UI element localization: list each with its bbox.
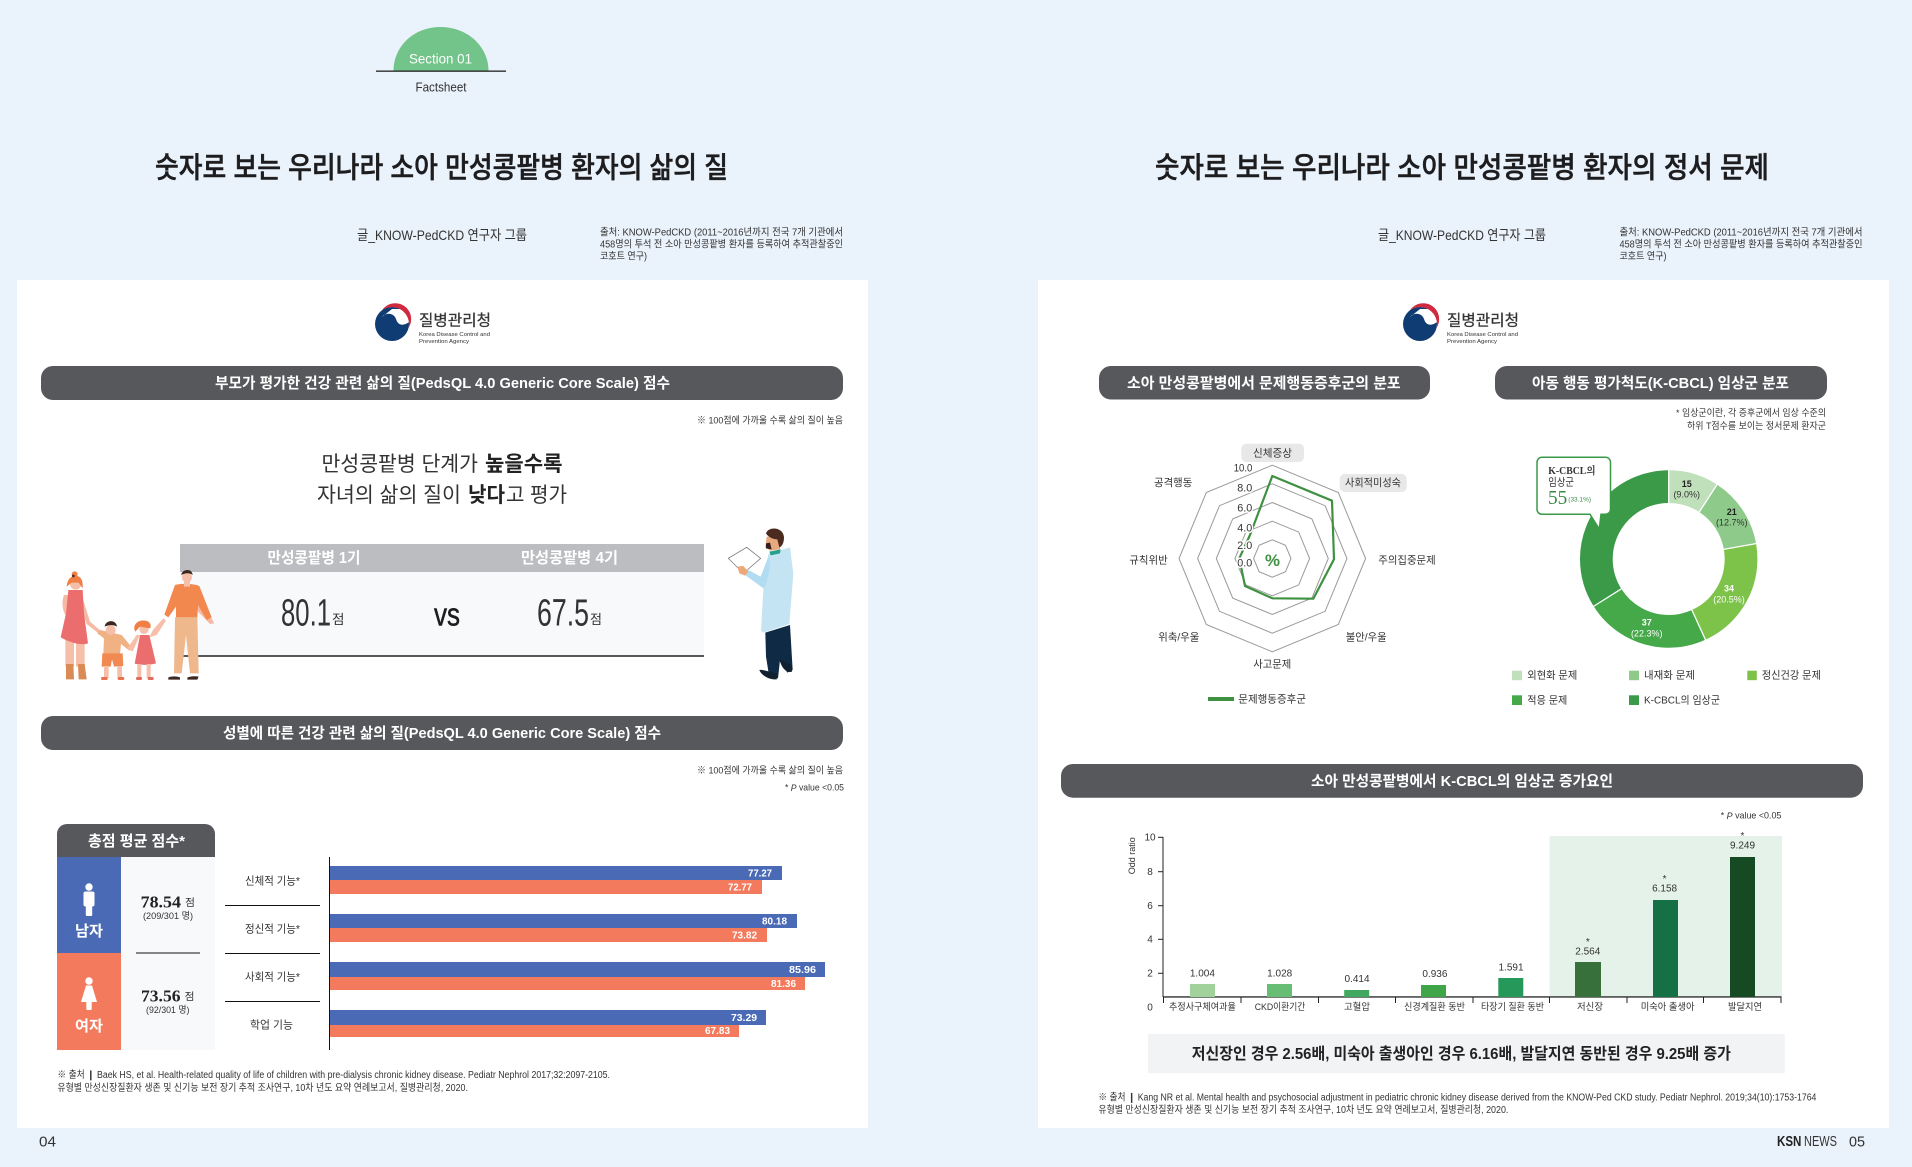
comparison table: stage 1 vs stage 4: 67.5 (537, 593, 589, 635)
donut chart: K-CBCL clinical groups: 21 (1727, 507, 1737, 517)
footnote: left references (57, 1069, 610, 1094)
source note: left page: 출처: KNOW-PedCKD (2011~2016년까지 전국 7개 기관에서 (600, 227, 843, 239)
bar chart: QoL domains by gender: 80.18 (762, 916, 787, 928)
source note: left page: 458명의 투석 전 소아 만성콩팥병 환자를 등록하여 추적관찰중인 (600, 238, 843, 251)
footnote: right references (1098, 1092, 1817, 1116)
panel: total mean scores: 점 (185, 897, 195, 909)
radar chart: problem behavior syndromes: 10.0 (1234, 463, 1252, 475)
title: right page: 숫자로 보는 우리나라 소아 만성콩팥병 환자의 정서 문제 (1155, 152, 1769, 185)
callout: K-CBCL clinical group count (1537, 457, 1610, 529)
panel: total mean scores: 78.54 (141, 893, 182, 912)
donut chart: K-CBCL clinical groups (1512, 457, 1821, 706)
logo: left: Korea Disease Control and (419, 332, 490, 338)
bar chart: odds ratios: 8 (1147, 867, 1153, 878)
bar chart: odds ratios: 10 (1144, 832, 1156, 843)
radar chart: problem behavior syndromes: 문제행동증후군 (1238, 694, 1306, 706)
panel: total mean scores: (92/301 명) (146, 1005, 190, 1016)
bar chart: odds ratios: 9.249 (1730, 840, 1755, 851)
panel: total mean scores: 73.56 (141, 987, 180, 1006)
headline message: 만성콩팥병 단계가 (322, 453, 478, 476)
logo: right: 질병관리청 (1447, 312, 1519, 330)
bar chart: odds ratios: 0.936 (1422, 969, 1448, 980)
section badge: Factsheet (416, 81, 467, 95)
notes: score meaning and p value (697, 765, 844, 794)
bar chart: QoL domains by gender: 85.96 (789, 964, 816, 976)
donut chart: K-CBCL clinical groups: (22.3%) (1631, 628, 1662, 638)
radar chart: problem behavior syndromes: 8.0 (1237, 483, 1252, 495)
callout: K-CBCL clinical group count: K-CBCL의 (1548, 464, 1596, 477)
bar chart: QoL domains by gender: 신체적 기능* (245, 875, 301, 888)
note: clinical group definition: * 임상군이란, 각 증후군에서 임상 수준의 (1676, 407, 1826, 419)
donut legend: 정신건강 문제 (1762, 670, 1821, 682)
brand and page number: 05 (1777, 1134, 1865, 1151)
donut chart: K-CBCL clinical groups: (12.7%) (1716, 518, 1747, 528)
donut legend: 적응 문제 (1527, 694, 1567, 706)
heading bar: K-CBCL risk factors (1061, 764, 1863, 798)
donut chart: K-CBCL clinical groups: (9.0%) (1673, 489, 1700, 499)
radar chart: problem behavior syndromes: 규칙위반 (1129, 554, 1168, 567)
logo: right: Prevention Agency (1447, 339, 1497, 345)
source note: right page: 코호트 연구) (1620, 251, 1666, 263)
bar chart: QoL domains by gender: 77.27 (748, 868, 772, 880)
donut legend: K-CBCL의 임상군 (1644, 693, 1720, 706)
source note: right page: 출처: KNOW-PedCKD (2011~2016년까지 전국 7개 기관에서 (1620, 227, 1862, 239)
panel: left page (17, 280, 868, 1128)
bar chart: QoL domains by gender: 67.83 (705, 1025, 730, 1037)
bar chart: odds ratios: 발달지연 (1728, 1001, 1762, 1013)
logo: right: Korea Disease Control and (1447, 332, 1518, 338)
bar chart: QoL domains by gender: 73.82 (732, 930, 757, 942)
bar chart: odds ratios: 2.564 (1575, 946, 1601, 957)
section badge (376, 27, 506, 95)
bar chart: QoL domains by gender: 72.77 (728, 882, 752, 894)
callout: K-CBCL clinical group count: (33.1%) (1568, 498, 1591, 504)
note: p value: * P value <0.05 (1721, 811, 1781, 822)
bar chart: odds ratios: 추정사구체여과율 (1169, 1001, 1236, 1013)
bar chart: odds ratios: 6.158 (1652, 883, 1678, 894)
heading bar: QoL by gender (41, 716, 843, 750)
comparison table: stage 1 vs stage 4: vs (434, 597, 460, 633)
panel: right page (1038, 280, 1889, 1128)
bar chart: odds ratios: 신경계질환 동반 (1404, 1001, 1465, 1013)
bar chart: odds ratios: 1.004 (1190, 968, 1215, 979)
headline message: 자녀의 삶의 질이 (317, 484, 461, 507)
source note: right page (1620, 227, 1862, 263)
callout: key finding: 저신장인 경우 2.56배, 미숙아 출생아인 경우 6.16배, 발달지연 동반된 경우 9.25배 증가 (1192, 1045, 1731, 1063)
headline message: 높을수록 (485, 453, 562, 476)
radar chart: problem behavior syndromes: % (1265, 551, 1280, 570)
heading bar: K-CBCL risk factors: 소아 만성콩팥병에서 K-CBCL의 임상군 증가요인 (1311, 773, 1613, 790)
bar chart: QoL domains by gender: 사회적 기능* (245, 971, 301, 984)
heading bar: parent-rated QoL: 부모가 평가한 건강 관련 삶의 질(PedsQL 4.0 Generic Core Scale) 점수 (215, 375, 670, 392)
comparison table: stage 1 vs stage 4: 만성콩팥병 1기 (268, 549, 360, 567)
radar chart: problem behavior syndromes: 사회적미성숙 (1345, 477, 1401, 489)
panel: total mean scores: 남자 (75, 923, 103, 940)
donut legend: 내재화 문제 (1644, 670, 1695, 682)
comparison table: stage 1 vs stage 4: 점 (590, 612, 602, 627)
comparison table: stage 1 vs stage 4: 만성콩팥병 4기 (521, 549, 618, 567)
logo: left (375, 303, 491, 345)
panel: total mean scores: (209/301 명) (143, 911, 193, 922)
notes: score meaning and p value: * P value <0.05 (785, 783, 844, 794)
note: clinical group definition: 하위 T점수를 보이는 정서문제 환자군 (1687, 420, 1826, 432)
headline message: 고 평가 (506, 484, 567, 507)
logo: right (1403, 303, 1519, 345)
radar chart: problem behavior syndromes: 2.0 (1237, 540, 1252, 552)
logo: left: 질병관리청 (419, 312, 491, 330)
donut legend (1512, 670, 1821, 706)
bar chart: QoL domains by gender: 학업 기능 (250, 1019, 293, 1032)
panel: total mean scores: 총점 평균 점수* (88, 833, 185, 850)
donut chart: K-CBCL clinical groups: 37 (1642, 617, 1652, 627)
footnote: right references: 유형별 만성신장질환자 생존 및 신기능 보전 장기 추적 조사연구, 10차 년도 요약 연례보고서, 질병관리청, 2020. (1098, 1104, 1508, 1116)
bar chart: odds ratios: * (1663, 874, 1667, 885)
radar chart: problem behavior syndromes: 위축/우울 (1158, 631, 1200, 644)
source note: left page (600, 227, 843, 263)
bar chart: odds ratios: * (1741, 831, 1745, 842)
donut chart: K-CBCL clinical groups: 34 (1724, 584, 1734, 594)
panel: total mean scores (57, 824, 215, 1050)
headline message: 낮다 (468, 484, 505, 507)
page number: 04: 04 (39, 1134, 56, 1151)
byline: left page: 글_KNOW-PedCKD 연구자 그룹 (357, 227, 527, 243)
bar chart: odds ratios: 0.414 (1344, 974, 1370, 985)
bar chart: odds ratios: Odd ratio (1127, 837, 1137, 874)
comparison table: stage 1 vs stage 4: 점 (332, 612, 344, 627)
title: left page: 숫자로 보는 우리나라 소아 만성콩팥병 환자의 삶의 질 (155, 152, 728, 185)
note: score meaning: ※ 100점에 가까울 수록 삶의 질이 높음 (697, 415, 843, 427)
bar chart: QoL domains by gender: 81.36 (771, 978, 796, 990)
bar chart: QoL domains by gender: 73.29 (731, 1012, 757, 1024)
logo: left: Prevention Agency (419, 339, 469, 345)
icon: female (81, 977, 97, 1010)
bar chart: QoL domains by gender (225, 857, 825, 1050)
radar chart: problem behavior syndromes: 0.0 (1237, 557, 1252, 569)
bar chart: odds ratios: 미숙아 출생아 (1641, 1002, 1695, 1013)
notes: score meaning and p value: ※ 100점에 가까울 수록 삶의 질이 높음 (697, 765, 843, 777)
donut chart: K-CBCL clinical groups: 15 (1682, 479, 1692, 489)
bar chart: odds ratios: 저신장 (1577, 1002, 1603, 1013)
radar chart: problem behavior syndromes: 사고문제 (1253, 659, 1291, 671)
heading bar: problem behavior distribution: 소아 만성콩팥병에서 문제행동증후군의 분포 (1127, 375, 1401, 392)
illustration: family (61, 570, 214, 680)
comparison table: stage 1 vs stage 4 (180, 544, 704, 657)
headline message (317, 453, 567, 507)
bar chart: odds ratios: 2 (1147, 968, 1153, 979)
radar chart: problem behavior syndromes: 주의집중문제 (1378, 555, 1436, 567)
footnote: right references: ※ 출처 ❙ Kang NR et al. Mental health and psychosocial adjustment in pediatric chronic kidney disease derived from the KNOW-Ped CKD study. Pediatr Nephrol. 2019;34(10):1753-1764 (1098, 1092, 1817, 1104)
bar chart: odds ratios: 6 (1147, 901, 1153, 912)
section badge: Section 01 (409, 51, 472, 67)
callout: K-CBCL clinical group count: 임상군 (1548, 475, 1574, 488)
bar chart: odds ratios: 타장기 질환 동반 (1481, 1001, 1544, 1013)
callout: K-CBCL clinical group count: 55 (1548, 487, 1567, 509)
radar chart: problem behavior syndromes: 공격행동 (1154, 476, 1193, 489)
note: clinical group definition (1676, 407, 1826, 432)
heading bar: K-CBCL clinical distribution (1495, 366, 1827, 400)
panel: total mean scores: 점 (184, 991, 194, 1003)
brand and page number: 05: KSN (1777, 1134, 1801, 1150)
donut legend: 외현화 문제 (1527, 670, 1577, 682)
bar chart: odds ratios: 1.591 (1498, 962, 1524, 973)
heading bar: parent-rated QoL (41, 366, 843, 400)
byline: right page: 글_KNOW-PedCKD 연구자 그룹 (1378, 227, 1546, 243)
bar chart: odds ratios: 0 (1147, 1002, 1153, 1013)
bar chart: odds ratios: 4 (1147, 934, 1153, 945)
bar chart: QoL domains by gender: 정신적 기능* (245, 923, 301, 936)
brand and page number: 05: 05 (1849, 1134, 1865, 1151)
callout: key finding (1148, 1034, 1785, 1073)
bar chart: odds ratios: CKD이환기간 (1255, 1001, 1306, 1013)
radar chart: problem behavior syndromes: 4.0 (1237, 523, 1252, 535)
comparison table: stage 1 vs stage 4: 80.1 (281, 593, 331, 635)
radar chart: problem behavior syndromes (1129, 444, 1436, 706)
source note: right page: 458명의 투석 전 소아 만성콩팥병 환자를 등록하여 추적관찰중인 (1620, 238, 1862, 251)
footnote: left references: ※ 출처 ❙ Baek HS, et al. Health-related quality of life of children with pre-dialysis chronic kidney disease. Pediatr Nephrol 2017;32:2097-2105. (57, 1069, 610, 1081)
radar chart: problem behavior syndromes: 6.0 (1237, 502, 1252, 514)
bar chart: odds ratios: 고혈압 (1344, 1001, 1370, 1013)
brand and page number: 05: NEWS (1804, 1134, 1837, 1150)
heading bar: K-CBCL clinical distribution: 아동 행동 평가척도(K-CBCL) 임상군 분포 (1532, 375, 1789, 392)
donut chart: K-CBCL clinical groups: (20.5%) (1713, 595, 1745, 605)
radar chart: problem behavior syndromes: 불안/우울 (1346, 632, 1387, 644)
heading bar: problem behavior distribution (1099, 366, 1430, 400)
source note: left page: 코호트 연구) (600, 251, 647, 263)
bar chart: odds ratios: 1.028 (1267, 968, 1293, 979)
panel: total mean scores: 여자 (75, 1018, 103, 1035)
bar chart: odds ratios (1127, 831, 1782, 1014)
bar chart: odds ratios: * (1586, 937, 1590, 948)
icon: male (84, 883, 94, 916)
heading bar: QoL by gender: 성별에 따른 건강 관련 삶의 질(PedsQL 4.0 Generic Core Scale) 점수 (223, 725, 661, 742)
footnote: left references: 유형별 만성신장질환자 생존 및 신기능 보전 장기 추적 조사연구, 10차 년도 요약 연례보고서, 질병관리청, 2020. (57, 1082, 468, 1094)
illustration: doctor (728, 528, 793, 679)
radar chart: problem behavior syndromes: 신체증상 (1253, 447, 1292, 459)
